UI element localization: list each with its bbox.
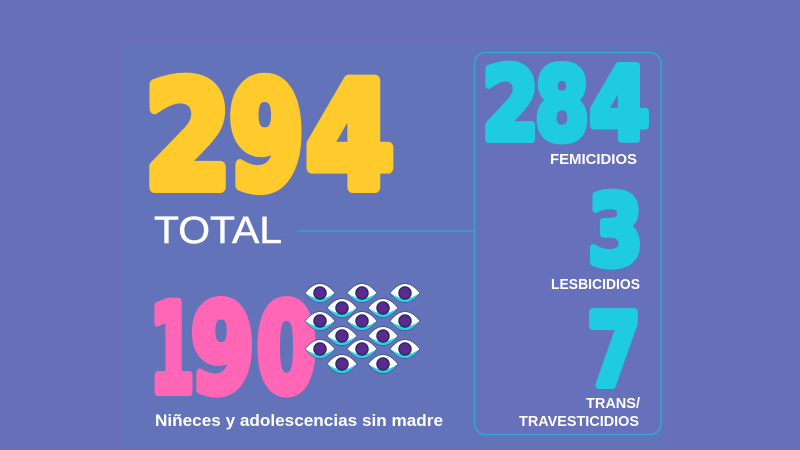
number: 284 femicides: 8 [535, 46, 589, 163]
number: 294 total: 9 [229, 52, 304, 222]
number: 284 femicides [482, 46, 650, 163]
connector line [298, 230, 474, 232]
label: femicidios: FEMICIDIOS [550, 152, 637, 168]
number: 284 femicides: 2 [482, 46, 539, 163]
number: 284 femicides: 4 [590, 46, 650, 163]
panel: breakdown frame [474, 52, 661, 434]
number: 294 total: 2 [144, 52, 232, 222]
number: 3 lesbicides: 3 [588, 175, 643, 287]
label: trans/travesticidios: TRANS/ [586, 396, 640, 412]
icon: grid of eyes [304, 283, 420, 374]
inner panel background [122, 45, 666, 450]
number: 294 total: 4 [306, 52, 394, 222]
caption: children without mother: Niñeces y adolescencias sin madre [155, 411, 443, 430]
label: lesbicidios: LESBICIDIOS [551, 277, 640, 293]
label: total: TOTAL [154, 210, 282, 252]
label: trans/travesticidios [519, 396, 640, 430]
label: trans/travesticidios: TRAVESTICIDIOS [519, 414, 639, 430]
number: 7 trans/travesticides: 7 [587, 292, 641, 409]
number: 190 children: 9 [190, 278, 254, 420]
number: 190 children: 0 [256, 278, 316, 420]
number: 190 children: 1 [150, 278, 194, 420]
number: 190 children [150, 278, 316, 420]
number: 294 total [144, 52, 394, 222]
